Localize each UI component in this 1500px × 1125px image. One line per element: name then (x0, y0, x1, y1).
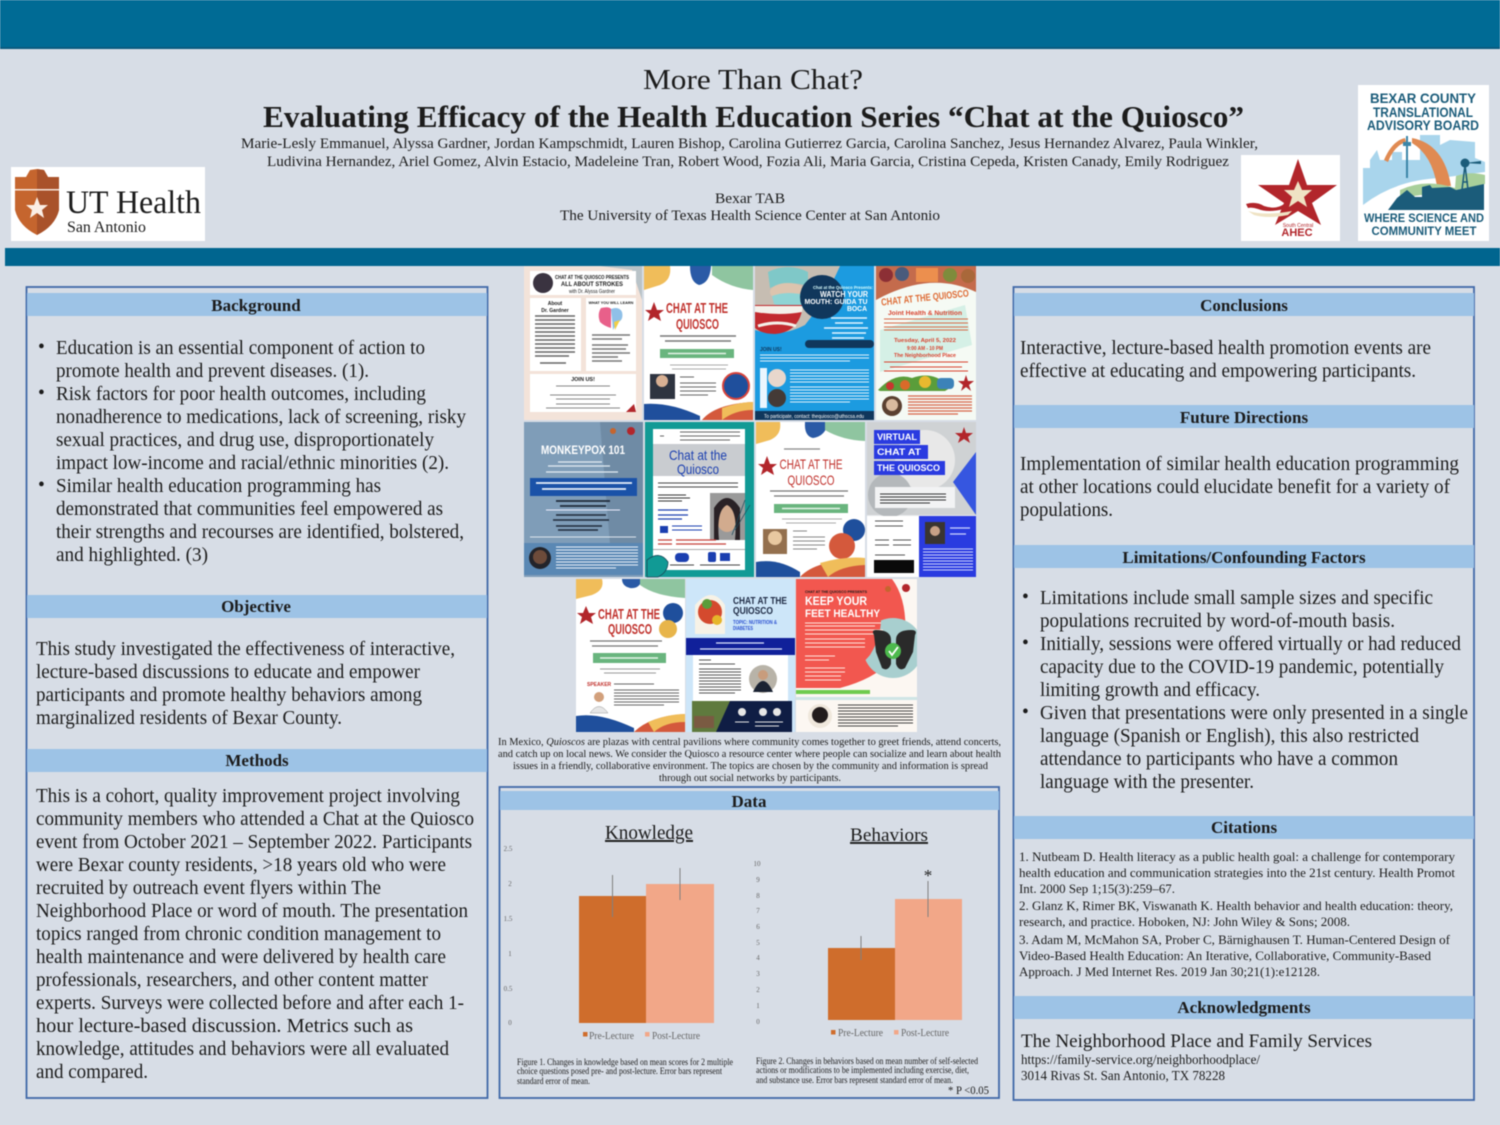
section: objective: marginalized residents of Bexar County. (36, 708, 342, 729)
logo: UT Health San Antonio: San Antonio (67, 219, 146, 236)
section: background: Background (211, 296, 301, 315)
section: methods: were Bexar county residents, >18 years old who were (36, 855, 446, 876)
flyer: chat at the quiosco teal (645, 422, 754, 577)
logo: Bexar County Translational Advisory Board: ADVISORY BOARD (1367, 118, 1479, 133)
flyer: chat at the quiosco white (756, 422, 865, 577)
section: limitations: language (Spanish or English), this also restricted (1040, 726, 1419, 747)
section: background: Risk factors for poor health outcomes, including (56, 384, 426, 405)
section: citations: 1. Nutbeam D. Health literacy as a public health goal: a challenge for contemporary (1019, 850, 1456, 864)
flyer: nutrition and diabetes: TOPIC: NUTRITION & (733, 620, 777, 626)
chart: knowledge: 0 (508, 1019, 512, 1027)
panel: right column (1014, 287, 1474, 1100)
section: citations: Approach. J Med Internet Res. 2019 Jan 30;21(1):e12128. (1019, 965, 1320, 979)
chart: knowledge: 1 (508, 950, 512, 958)
section: methods: community members who attended a Chat at the Quiosco (36, 809, 474, 830)
section: citations (1014, 816, 1474, 979)
section: limitations: attendance to participants who have a common (1040, 749, 1398, 770)
section: objective: participants and promote healthy behaviors among (36, 685, 422, 706)
top banner (0, 0, 1500, 49)
section: citations: Int. 2000 Sep 1;15(3):259–67. (1019, 882, 1175, 896)
flyer: chat at the quiosco mental health: QUIOSCO (608, 621, 652, 638)
logo: UT Health San Antonio (11, 167, 205, 241)
section: limitations: Given that presentations were only presented in a single (1040, 703, 1468, 724)
chart: knowledge: Pre-Lecture (589, 1031, 635, 1042)
flyer: chat at the quiosco white: QUIOSCO (788, 472, 835, 488)
section: methods: professionals, researchers, and other content matter (36, 970, 428, 991)
logo: Bexar County Translational Advisory Board: COMMUNITY MEET (1372, 224, 1477, 238)
section: citations: health education and communication strategies into the 21st century. Health Promot (1019, 866, 1456, 880)
section: limitations: • (1022, 633, 1029, 654)
title block: More Than Chat? (643, 64, 863, 96)
flyer: nutrition and diabetes: QUIOSCO (733, 606, 773, 617)
panel: left column (26, 287, 488, 1098)
section: citations: research, and practice. Hoboken, NJ: John Wiley & Sons; 2008. (1019, 915, 1350, 929)
flyer: nutrition and diabetes (686, 579, 795, 732)
chart: behaviors: 8 (756, 892, 760, 900)
logo: Bexar County Translational Advisory Board: BEXAR COUNTY (1370, 91, 1476, 106)
flyer: all about strokes: ALL ABOUT STROKES (561, 282, 623, 288)
section: methods: Neighborhood Place or word of mouth. The presentation (36, 901, 468, 922)
chart: behaviors: * (924, 866, 932, 885)
section: limitations: • (1022, 702, 1029, 723)
section: future directions: at other locations could elucidate benefit for a variety of (1020, 477, 1450, 498)
flyer: watch your mouth: MOUTH: GUIDA TU (804, 297, 868, 306)
section: background: Education is an essential component of action to (56, 338, 425, 359)
chart: behaviors: 0 (756, 1018, 760, 1026)
section: methods: topics ranged from chronic condition management to (36, 924, 441, 945)
chart: knowledge: 2.5 (504, 845, 513, 853)
section: methods: This is a cohort, quality improvement project involving (36, 786, 460, 807)
section: background: impact low-income and racial/ethnic minorities (2). (56, 453, 449, 474)
chart: behaviors: 1 (756, 1002, 760, 1010)
authors: Marie-Lesly Emmanuel, Alyssa Gardner, Jordan Kampschmidt, Lauren Bishop, Carolina Gutierrez Garcia, Carolina Sanchez, Jesus Hernandez Alvarez, Paula Winkler, (241, 136, 1258, 152)
section: methods: and compared. (36, 1062, 148, 1083)
flyer: nutrition and diabetes: CHAT AT THE (733, 596, 787, 607)
section: background: • (38, 383, 45, 404)
flyer: watch your mouth: WATCH YOUR (820, 290, 868, 299)
flyer: all about strokes: with Dr. Alyssa Gardner (569, 289, 615, 295)
flyer: watch your mouth: To participate, contact: thequiosco@uthscsa.edu (764, 414, 864, 420)
section: methods: event from October 2021 – September 2022. Participants (36, 832, 472, 853)
flyer collage (524, 266, 976, 732)
flyer: chat at the quiosco vaccines: CHAT AT THE (666, 300, 728, 317)
section: limitations: Limitations/Confounding Factors (1122, 548, 1366, 567)
collage caption: In Mexico, Quioscos are plazas with central pavilions where community comes together to greet friends, attend concerts, (498, 736, 1001, 748)
flyer: chat at the quiosco mental health: SPEAKER (587, 682, 612, 688)
section: future directions: populations. (1020, 500, 1113, 521)
flyer: keep your feet healthy: FEET HEALTHY (805, 608, 881, 620)
flyer: joint health and nutrition: 9:00 AM - 10 PM (907, 346, 943, 352)
flyer: chat at the quiosco vaccines (644, 266, 753, 420)
section: methods: hour lecture-based discussion. Metrics such as (36, 1016, 413, 1037)
chart: behaviors (754, 825, 962, 1039)
flyer: all about strokes: JOIN US! (571, 377, 595, 383)
title block: Evaluating Efficacy of the Health Education Series “Chat at the Quiosco” (263, 99, 1244, 134)
flyer: chat at the quiosco teal: Chat at the (669, 447, 727, 463)
section: acknowledgments: Acknowledgments (1177, 998, 1311, 1017)
flyer: virtual chat at the quiosco: CHAT AT (877, 447, 922, 457)
section: limitations (1014, 545, 1474, 793)
flyer: joint health and nutrition (876, 266, 976, 420)
flyer: keep your feet healthy (796, 579, 927, 732)
chart: knowledge: 1.5 (504, 915, 513, 923)
flyer: joint health and nutrition: CHAT AT THE QUIOSCO (881, 288, 970, 309)
section: background: nonadherence to medications, lack of screening, risky (56, 407, 466, 428)
chart: knowledge: 2 (508, 880, 512, 888)
flyer: watch your mouth: JOIN US! (760, 347, 782, 353)
figure 1 caption (517, 1057, 733, 1086)
section: limitations: • (1022, 587, 1029, 608)
section: conclusions: Conclusions (1200, 296, 1288, 315)
section: background: sexual practices, and drug use, disproportionately (56, 430, 434, 451)
chart: knowledge (504, 823, 714, 1042)
section: methods: knowledge, attitudes and behaviors were all evaluated (36, 1039, 449, 1060)
flyer: joint health and nutrition: Joint Health & Nutrition (888, 310, 962, 317)
flyer: watch your mouth: Chat at the Quiosco Presents: (813, 285, 873, 290)
flyer: all about strokes (524, 266, 642, 420)
flyer: virtual chat at the quiosco (867, 422, 976, 577)
collage caption (498, 736, 1001, 784)
section: background: their strengths and recourses are identified, bolstered, (56, 522, 464, 543)
logo: South Central AHEC: South Central (1283, 223, 1313, 229)
chart: behaviors: Post-Lecture (901, 1028, 950, 1039)
section: limitations: language with the presenter. (1040, 772, 1254, 793)
section: conclusions: Interactive, lecture-based health promotion events are (1020, 338, 1431, 359)
section: background: Similar health education programming has (56, 476, 381, 497)
section: conclusions: effective at educating and empowering participants. (1020, 361, 1416, 382)
chart: behaviors: Pre-Lecture (838, 1028, 884, 1039)
flyer: chat at the quiosco mental health (576, 579, 685, 732)
section: citations: Citations (1211, 818, 1277, 837)
figure 2 caption: Figure 2. Changes in behaviors based on mean number of self-selected (756, 1056, 978, 1066)
chart: behaviors: 3 (756, 970, 760, 978)
logo: UT Health San Antonio: UT Health (66, 185, 201, 221)
authors: Ludivina Hernandez, Ariel Gomez, Alvin Estacio, Madeleine Tran, Robert Wood, Fozia Ali, Maria Garcia, Cristina Cepeda, Kristen Canady, Emily Rodriguez (267, 154, 1229, 170)
section: acknowledgments: The Neighborhood Place and Family Services (1021, 1031, 1372, 1052)
figure 2 caption (756, 1056, 978, 1085)
section: objective: lecture-based discussions to educate and empower (36, 662, 420, 683)
logo: South Central AHEC (1241, 155, 1340, 241)
section: methods (27, 749, 487, 1083)
section: acknowledgments: 3014 Rivas St. San Antonio, TX 78228 (1021, 1068, 1225, 1083)
section: future directions: Future Directions (1180, 408, 1309, 427)
collage caption: through out social networks by participants. (659, 772, 841, 784)
section: limitations: limiting growth and efficacy. (1040, 680, 1260, 701)
title block (263, 64, 1244, 134)
section: objective: This study investigated the effectiveness of interactive, (36, 639, 455, 660)
section: methods: health maintenance and were delivered by health care (36, 947, 446, 968)
panel: data (500, 787, 999, 1098)
flyer: monkeypox 101 (524, 422, 643, 577)
section: future directions (1014, 405, 1474, 521)
flyer: all about strokes: WHAT YOU WILL LEARN (589, 301, 634, 305)
flyer: chat at the quiosco white: CHAT AT THE (780, 456, 842, 472)
figure 2 caption: actions or modifications to be implemented including exercise, diet, (756, 1065, 969, 1075)
figure 1 caption: Figure 1. Changes in knowledge based on mean scores for 2 multiple (517, 1057, 733, 1067)
section: limitations: Limitations include small sample sizes and specific (1040, 588, 1433, 609)
authors (241, 136, 1258, 170)
flyer: all about strokes: Dr. Gardner (541, 308, 569, 314)
collage caption: and catch up on local news. We consider the Quiosco a resource center where people can socialize and learn about health (498, 748, 1001, 760)
section: acknowledgments (1014, 996, 1474, 1083)
section: objective (27, 595, 487, 729)
header divider bar (5, 248, 1500, 266)
flyer: monkeypox 101: MONKEYPOX 101 (541, 443, 625, 457)
flyer: watch your mouth: BOCA (847, 304, 868, 313)
section: citations: 3. Adam M, McMahon SA, Prober C, Bärnighausen T. Human-Centered Design of (1019, 933, 1451, 947)
significance note: * P <0.05 (948, 1083, 989, 1097)
section: limitations: populations recruited by word-of-mouth basis. (1040, 611, 1395, 632)
section: background: and highlighted. (3) (56, 545, 208, 566)
panel: data: Data (732, 792, 767, 811)
section: methods: experts. Surveys were collected before and after each 1- (36, 993, 464, 1014)
flyer: all about strokes: About (548, 301, 563, 307)
affiliation (560, 191, 940, 224)
section: conclusions (1014, 293, 1474, 382)
section: background: • (38, 475, 45, 496)
chart: behaviors: 6 (756, 923, 760, 931)
flyer: virtual chat at the quiosco: VIRTUAL (877, 432, 918, 442)
section: future directions: Implementation of similar health education programming (1020, 454, 1459, 475)
flyer: chat at the quiosco vaccines: QUIOSCO (676, 316, 719, 333)
flyer: joint health and nutrition: The Neighborhood Place (894, 353, 956, 359)
section: citations: Video-Based Health Education: An Iterative, Collaborative, Community-Based (1019, 949, 1432, 963)
chart: behaviors: 5 (756, 939, 760, 947)
affiliation: The University of Texas Health Science Center at San Antonio (560, 208, 940, 224)
flyer: chat at the quiosco teal: Quiosco (677, 461, 719, 477)
logo: Bexar County Translational Advisory Board: WHERE SCIENCE AND (1364, 211, 1484, 225)
chart: knowledge: Knowledge (605, 823, 693, 844)
chart: behaviors: 10 (754, 860, 761, 868)
flyer: keep your feet healthy: KEEP YOUR (805, 594, 867, 608)
section: methods: Methods (225, 751, 289, 770)
affiliation: Bexar TAB (715, 191, 785, 207)
section: limitations: capacity due to the COVID-19 pandemic, potentially (1040, 657, 1444, 678)
section: background: promote health and prevent diseases. (1). (56, 361, 369, 382)
logo: Bexar County Translational Advisory Board: TRANSLATIONAL (1373, 105, 1473, 120)
section: objective: Objective (221, 597, 291, 616)
chart: behaviors: 7 (756, 907, 760, 915)
section: citations: 2. Glanz K, Rimer BK, Viswanath K. Health behavior and health education: theory, (1019, 899, 1453, 913)
figure 1 caption: standard error of mean. (517, 1076, 590, 1086)
logo: Bexar County Translational Advisory Board (1358, 85, 1489, 241)
figure 2 caption: and substance use. Error bars represent standard error of mean. (756, 1075, 953, 1085)
section: background: demonstrated that communities feel empowered as (56, 499, 443, 520)
flyer: virtual chat at the quiosco: THE QUIOSCO (877, 463, 940, 473)
flyer: keep your feet healthy: CHAT AT THE QUIOSCO PRESENTS (805, 589, 867, 594)
chart: behaviors: Behaviors (850, 825, 928, 846)
section: limitations: Initially, sessions were offered virtually or had reduced (1040, 634, 1461, 655)
chart: knowledge: Post-Lecture (652, 1031, 701, 1042)
section: acknowledgments: https://family-service.org/neighborhoodplace/ (1021, 1052, 1260, 1067)
collage caption: issues in a friendly, collaborative environment. The topics are chosen by the community and information is spread (513, 760, 988, 772)
flyer: watch your mouth (755, 266, 874, 420)
figure 1 caption: choice questions posed pre- and post-lecture. Error bars represent (517, 1066, 722, 1076)
section: methods: recruited by outreach event flyers within The (36, 878, 381, 899)
section: background (27, 293, 487, 566)
flyer: chat at the quiosco mental health: CHAT AT THE (598, 606, 660, 623)
chart: behaviors: 2 (756, 986, 760, 994)
flyer: nutrition and diabetes: DIABETES (733, 626, 753, 632)
chart: behaviors: 4 (756, 954, 760, 962)
flyer: all about strokes: CHAT AT THE QUIOSCO PRESENTS (555, 275, 630, 281)
section: background: • (38, 337, 45, 358)
chart: knowledge: 0.5 (504, 985, 513, 993)
flyer: joint health and nutrition: Tuesday, April 5, 2022 (894, 338, 956, 344)
chart: behaviors: 9 (756, 876, 760, 884)
logo: South Central AHEC: AHEC (1281, 227, 1313, 239)
